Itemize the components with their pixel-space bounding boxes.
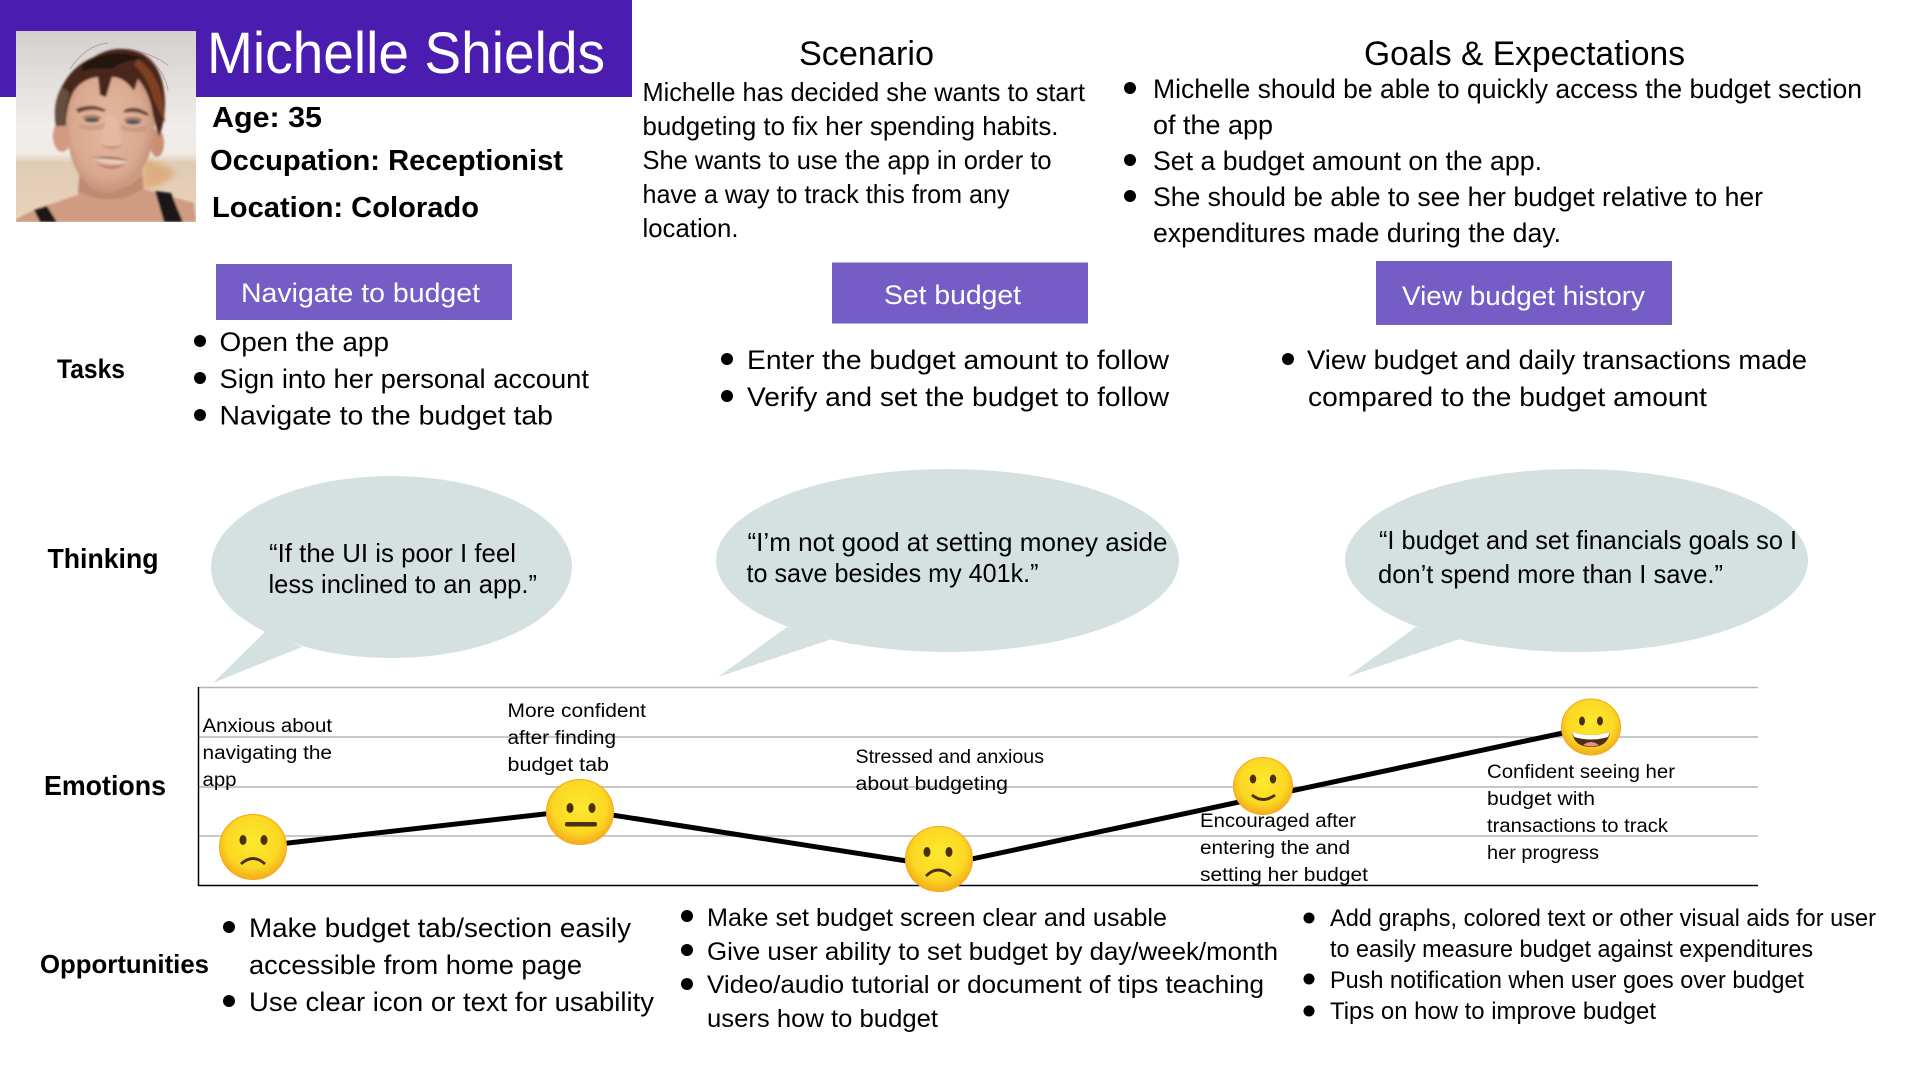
emotion note: encouraged: Encouraged after [1200, 811, 1357, 832]
goals list: of the app [1153, 110, 1273, 140]
emotion note: stressed: about budgeting [856, 774, 1008, 795]
opportunities list 2: Video/audio tutorial or document of tips teaching [707, 971, 1264, 999]
persona details [210, 102, 563, 224]
scenario text: budgeting to fix her spending habits. [642, 111, 1058, 141]
speech bubble 2: “I’m not good at setting money aside [748, 527, 1168, 557]
task list: set budget: Verify and set the budget to follow [747, 382, 1170, 412]
speech bubble 2 [716, 469, 1179, 677]
task button: view budget history: View budget history [1402, 281, 1646, 311]
emotion note: encouraged: setting her budget [1200, 865, 1369, 886]
emotion note: more confident [508, 701, 647, 776]
goals list: Michelle should be able to quickly access the budget section [1153, 74, 1862, 104]
speech bubble 1 [211, 476, 572, 683]
emotion line [253, 727, 1591, 866]
scenario text: location. [642, 213, 738, 243]
emoji: stressed [906, 826, 972, 892]
persona name: Michelle Shields [207, 21, 605, 86]
emotion note: confident: her progress [1487, 843, 1599, 864]
emotion note: more confident: after finding [508, 728, 616, 749]
task button: set budget: Set budget [884, 280, 1022, 310]
emotion note: anxious: navigating the [202, 743, 332, 764]
emotion note: confident: Confident seeing her [1487, 762, 1676, 783]
task list: navigate to budget [194, 327, 589, 430]
scenario text: have a way to track this from any [642, 179, 1010, 209]
heading: goals and expectations: Goals & Expectations [1364, 35, 1685, 73]
row label: emotions: Emotions [44, 770, 166, 801]
emotion note: encouraged [1200, 811, 1369, 886]
opportunities list 3 [1304, 905, 1876, 1025]
task list: set budget: Enter the budget amount to follow [747, 345, 1170, 375]
emotion note: anxious [202, 716, 333, 791]
opportunities list 3: Push notification when user goes over budget [1330, 967, 1804, 994]
persona details: Location: Colorado [212, 192, 479, 224]
opportunities list 3: Add graphs, colored text or other visual aids for user [1330, 905, 1876, 932]
emotion note: confident [1487, 762, 1676, 864]
persona photo [16, 31, 196, 222]
opportunities list 2: users how to budget [707, 1005, 938, 1033]
scenario text: Michelle has decided she wants to start [642, 77, 1086, 107]
heading: scenario: Scenario [799, 35, 934, 73]
goals list: expenditures made during the day. [1153, 218, 1561, 248]
task list: navigate to budget: Sign into her personal account [220, 364, 589, 394]
scenario text [642, 77, 1086, 243]
persona details: Occupation: Receptionist [210, 145, 563, 177]
task button: set budget [832, 262, 1088, 324]
emotion note: stressed: Stressed and anxious [856, 747, 1044, 768]
task list: view budget history [1282, 345, 1807, 412]
opportunities list 1: Make budget tab/section easily [249, 913, 632, 943]
speech bubble 1: less inclined to an app.” [268, 569, 537, 599]
goals list: Set a budget amount on the app. [1153, 146, 1542, 176]
emoji: encouraged [1234, 758, 1292, 814]
emotion note: anxious: app [202, 770, 236, 791]
emoji: neutral [546, 780, 614, 844]
speech bubble 3 [1345, 469, 1808, 677]
speech bubble 1: “If the UI is poor I feel [269, 538, 516, 568]
emotion note: confident: budget with [1487, 789, 1595, 810]
row label: thinking: Thinking [48, 543, 158, 574]
opportunities list 2: Give user ability to set budget by day/week/month [707, 938, 1278, 966]
opportunities list 1: accessible from home page [249, 950, 582, 980]
scenario text: She wants to use the app in order to [642, 145, 1052, 175]
speech bubble 3: don’t spend more than I save.” [1378, 559, 1723, 589]
opportunities list 2 [681, 904, 1278, 1033]
emotion note: encouraged: entering the and [1200, 838, 1350, 859]
task list: view budget history: compared to the budget amount [1308, 382, 1708, 412]
opportunities list 1: Use clear icon or text for usability [249, 987, 654, 1017]
task list: view budget history: View budget and daily transactions made [1307, 345, 1807, 375]
speech bubble 3: “I budget and set financials goals so I [1379, 525, 1797, 555]
task button: view budget history [1376, 261, 1672, 325]
emoji: anxious [220, 814, 286, 880]
emotion note: more confident: budget tab [508, 755, 609, 776]
goals list: She should be able to see her budget relative to her [1153, 182, 1763, 212]
opportunities list 2: Make set budget screen clear and usable [707, 904, 1167, 932]
header banner [0, 0, 632, 97]
emotion note: stressed [856, 747, 1044, 795]
task list: navigate to budget: Navigate to the budget tab [220, 400, 553, 430]
row label: tasks: Tasks [57, 354, 125, 384]
opportunities list 1 [223, 913, 654, 1017]
goals list [1124, 74, 1862, 248]
opportunities list 3: Tips on how to improve budget [1330, 998, 1656, 1025]
emotion note: anxious: Anxious about [202, 716, 333, 737]
task button: navigate to budget [216, 264, 512, 320]
emotion chart [198, 687, 1758, 892]
task list: navigate to budget: Open the app [220, 327, 389, 357]
emotion note: more confident: More confident [508, 701, 647, 722]
opportunities list 3: to easily measure budget against expenditures [1330, 936, 1813, 963]
task list: set budget [721, 345, 1170, 412]
speech bubble 2: to save besides my 401k.” [746, 558, 1038, 588]
persona details: Age: 35 [212, 102, 322, 134]
task button: navigate to budget: Navigate to budget [241, 278, 481, 308]
emotion note: confident: transactions to track [1487, 816, 1669, 837]
emoji: confident [1562, 699, 1620, 755]
row label: opportunities: Opportunities [40, 949, 209, 979]
